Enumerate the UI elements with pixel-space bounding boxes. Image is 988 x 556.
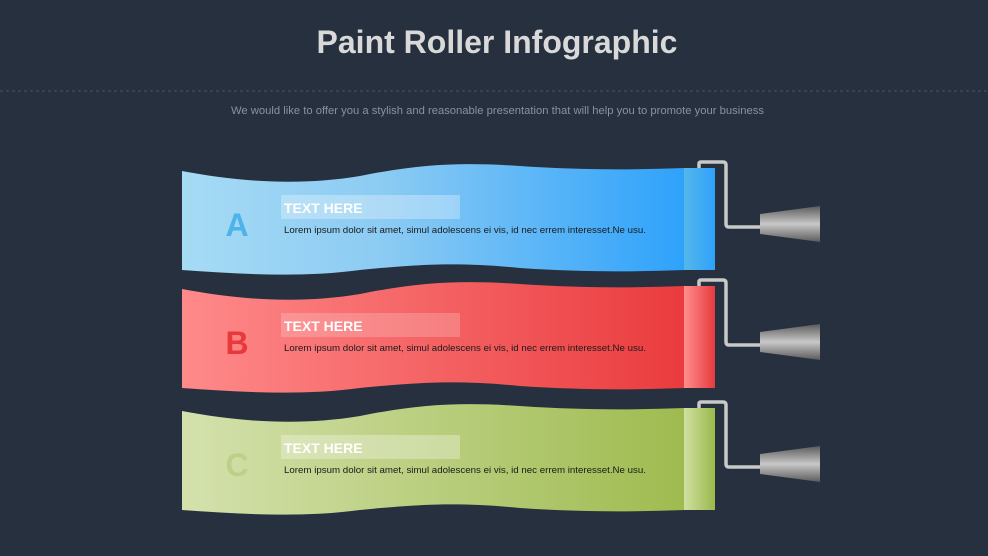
panel: C: Lorem ipsum dolor sit amet, simul adolescens ei vis, id nec errem interesset.Ne usu. (284, 465, 646, 476)
panel: A: TEXT HERE (284, 200, 363, 216)
title: Paint Roller Infographic (317, 24, 677, 60)
panel: C: TEXT HERE (284, 440, 363, 456)
panel: B: TEXT HERE (284, 318, 363, 334)
panel: C (182, 402, 820, 515)
subtitle: We would like to offer you a stylish and reasonable presentation that will help you to promote your business (231, 105, 765, 117)
panel: B: Lorem ipsum dolor sit amet, simul adolescens ei vis, id nec errem interesset.Ne usu. (284, 343, 646, 354)
panel: C: C (225, 447, 249, 483)
panel: A: Lorem ipsum dolor sit amet, simul adolescens ei vis, id nec errem interesset.Ne usu. (284, 225, 646, 236)
panel: B (182, 280, 820, 393)
panel: B: B (225, 325, 249, 361)
panel: A: A (225, 207, 249, 243)
panel: A (182, 162, 820, 275)
